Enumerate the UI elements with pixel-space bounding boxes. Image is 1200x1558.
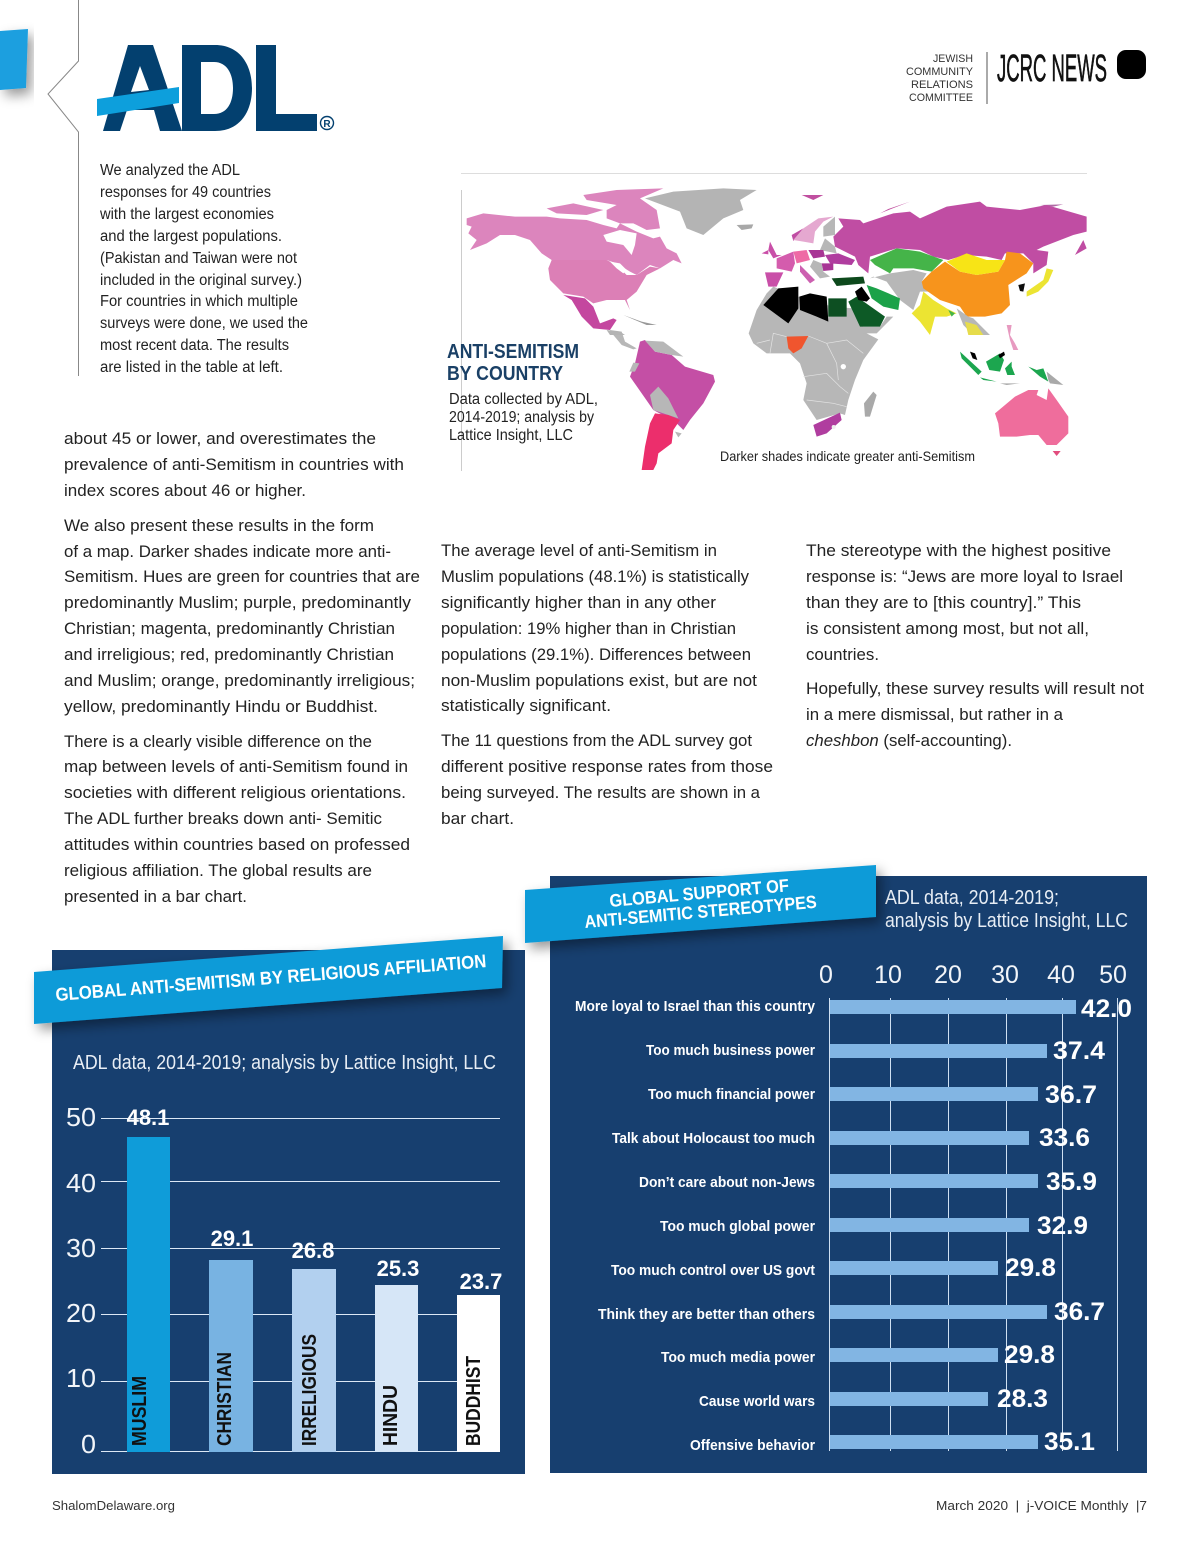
bar labels: HINDU [380, 1385, 402, 1446]
map source note: Data collected by ADL, [449, 391, 598, 408]
panel: religious affiliation bar chart [52, 950, 525, 1474]
intro text block: We analyzed the ADL [100, 162, 240, 179]
bar labels: IRRELIGIOUS [299, 1334, 321, 1446]
intro text block [99, 162, 308, 376]
body text: left column: and Muslim; orange, predominantly irreligious; [64, 671, 415, 690]
row labels: Offensive behavior [690, 1437, 815, 1454]
row labels: Too much control over US govt [611, 1262, 815, 1279]
x axis labels: 20 [934, 961, 962, 989]
row labels: Too much media power [661, 1349, 815, 1366]
x axis labels: 40 [1047, 961, 1075, 989]
banner: religious affiliation title [34, 936, 503, 1024]
body text: left column: presented in a bar chart. [64, 887, 247, 906]
body text: left column: prevalence of anti-Semitism in countries with [64, 455, 404, 474]
body text: middle column: bar chart. [441, 809, 514, 828]
bar values: 28.3 [997, 1385, 1048, 1413]
bar values: 42.0 [1081, 995, 1132, 1023]
y axis labels: 20 [66, 1298, 96, 1328]
body text: left column: religious affiliation. The global results are [64, 861, 372, 880]
body text: left column: of a map. Darker shades indicate more anti- [64, 542, 391, 561]
horizontal bars [830, 1000, 1076, 1449]
North America and Greenland [467, 188, 757, 335]
x axis labels: 30 [991, 961, 1019, 989]
body text: left column: The ADL further breaks down anti- Semitic [64, 809, 382, 828]
header: JCRC label [906, 53, 974, 104]
row labels [575, 998, 816, 1454]
footer: website: ShalomDelaware.org [52, 1498, 175, 1513]
bar labels: MUSLIM [129, 1376, 151, 1446]
world map [461, 174, 1087, 471]
bars [127, 1137, 500, 1452]
row labels: Don’t care about non-Jews [639, 1174, 815, 1191]
body text: right column: Hopefully, these survey results will result not [806, 679, 1144, 698]
body text: right column [806, 541, 1144, 750]
header: JCRC label: RELATIONS [911, 79, 973, 91]
page tab: blue corner marker [0, 29, 28, 90]
sidebar outline [48, 0, 78, 376]
bar values: 29.1 [211, 1226, 253, 1251]
body text: right column: than they are to [this country].” This [806, 593, 1081, 612]
row labels: More loyal to Israel than this country [575, 998, 816, 1015]
banner: religious affiliation title: GLOBAL ANTI-SEMITISM BY RELIGIOUS AFFILIATION [55, 950, 487, 1005]
chart subtitle: analysis by Lattice Insight, LLC [885, 910, 1128, 932]
row labels: Too much global power [660, 1218, 815, 1235]
banner: stereotypes title [525, 865, 876, 943]
body text: right column: in a mere dismissal, but rather in a [806, 705, 1064, 724]
bar labels [129, 1334, 485, 1446]
row labels: Too much financial power [648, 1086, 815, 1103]
body text: left column: Semitism. Hues are green for countries that are [64, 567, 420, 586]
footer: issue and page number: March 2020 | j-VOICE Monthly |7 [936, 1498, 1147, 1513]
body text: left column: map between levels of anti-Semitism found in [64, 757, 408, 776]
body text: middle column: Muslim populations (48.1%) is statistically [441, 567, 749, 586]
body text: left column: predominantly Muslim; purple, predominantly [64, 593, 412, 612]
bar values: 33.6 [1039, 1124, 1090, 1152]
body text: left column: index scores about 46 or higher. [64, 481, 306, 500]
body text: middle column: significantly higher than in any other [441, 593, 716, 612]
header: JCRC label: JEWISH [933, 53, 973, 65]
row labels: Talk about Holocaust too much [612, 1130, 815, 1147]
body text: left column: There is a clearly visible difference on the [64, 732, 372, 751]
bar values: 29.8 [1004, 1341, 1055, 1369]
body text: left column: about 45 or lower, and overestimates the [64, 429, 376, 448]
bar values: 36.7 [1045, 1081, 1097, 1109]
body text: middle column [441, 541, 773, 828]
y axis labels: 30 [66, 1233, 96, 1263]
chart subtitle: ADL data, 2014-2019; [885, 887, 1059, 909]
panel: stereotypes bar chart [550, 876, 1147, 1473]
body text: middle column: being surveyed. The results are shown in a [441, 783, 761, 802]
row labels: Cause world wars [699, 1393, 815, 1410]
bar values: 37.4 [1053, 1037, 1105, 1065]
bar values [127, 1105, 502, 1294]
body text: left column: and irreligious; red, predominantly Christian [64, 645, 394, 664]
intro text block: included in the original survey.) [100, 272, 302, 289]
map source note: 2014-2019; analysis by [449, 409, 594, 426]
y axis labels: 40 [66, 1168, 96, 1198]
y axis labels: 0 [81, 1429, 96, 1459]
body text: left column: We also present these results in the form [64, 516, 374, 535]
x axis labels: 0 [819, 961, 833, 989]
body text: right column: is consistent among most, but not all, [806, 619, 1089, 638]
header: JCRC News title [987, 48, 1146, 104]
body text: left column: attitudes within countries based on professed [64, 835, 410, 854]
intro text block: most recent data. The results [100, 337, 289, 354]
bar values: 36.7 [1054, 1298, 1105, 1326]
bar values: 25.3 [377, 1256, 419, 1281]
Europe, Middle East and Asia [762, 195, 1087, 335]
bar values: 48.1 [127, 1105, 169, 1130]
chart subtitle: ADL data, 2014-2019; analysis by Lattice Insight, LLC [73, 1052, 496, 1074]
Southeast Asia and Australia [960, 325, 1068, 456]
map heading: BY COUNTRY [447, 363, 564, 385]
body text: middle column: The 11 questions from the ADL survey got [441, 731, 752, 750]
y axis labels: 50 [66, 1102, 96, 1132]
intro text block: For countries in which multiple [100, 293, 298, 310]
intro text block: responses for 49 countries [100, 184, 271, 201]
bar values: 29.8 [1005, 1254, 1056, 1282]
intro text block: with the largest economies [99, 206, 274, 223]
bar values: 35.9 [1046, 1168, 1097, 1196]
map heading [447, 341, 579, 385]
x axis labels: 10 [874, 961, 902, 989]
body text: middle column: The average level of anti-Semitism in [441, 541, 717, 560]
intro text block: are listed in the table at left. [100, 359, 283, 376]
y axis labels: 10 [66, 1363, 96, 1393]
body text: right column: countries. [806, 645, 879, 664]
body text: left column [64, 429, 420, 906]
bar values [997, 995, 1132, 1456]
body text: middle column: non-Muslim populations exist, but are not [441, 671, 757, 690]
body text: left column: Christian; magenta, predominantly Christian [64, 619, 395, 638]
row labels: Think they are better than others [598, 1306, 815, 1323]
map heading: ANTI-SEMITISM [447, 341, 579, 363]
ADL logo: R [323, 119, 331, 130]
body text: right column: response is: “Jews are more loyal to Israel [806, 567, 1123, 586]
bar labels: CHRISTIAN [214, 1352, 236, 1446]
bar values: 32.9 [1037, 1212, 1088, 1240]
body text: middle column: population: 19% higher than in Christian [441, 619, 736, 638]
intro text block: (Pakistan and Taiwan were not [100, 250, 298, 267]
bar labels: BUDDHIST [463, 1356, 485, 1446]
map source note: Lattice Insight, LLC [449, 427, 573, 444]
bar values: 23.7 [460, 1269, 502, 1294]
banner: stereotypes title: GLOBAL SUPPORT OF [609, 875, 790, 911]
Africa and South America [610, 287, 878, 470]
bar values: 35.1 [1044, 1428, 1095, 1456]
map caption: Darker shades indicate greater anti-Semitism [720, 448, 975, 464]
ADL logo [97, 45, 334, 131]
x axis labels: 50 [1099, 961, 1127, 989]
body text: left column: societies with different religious orientations. [64, 783, 406, 802]
body text: middle column: statistically significant. [441, 696, 611, 715]
body text: right column: cheshbon (self-accounting). [806, 731, 1012, 750]
intro text block: surveys were done, we used the [100, 315, 308, 332]
map source note [449, 391, 598, 444]
body text: right column: The stereotype with the highest positive [806, 541, 1111, 560]
chart subtitle [885, 887, 1128, 932]
body text: middle column: populations (29.1%). Differences between [441, 645, 751, 664]
intro text block: and the largest populations. [100, 228, 282, 245]
row labels: Too much business power [646, 1042, 815, 1059]
body text: left column: yellow, predominantly Hindu or Buddhist. [64, 697, 378, 716]
banner: stereotypes title: ANTI-SEMITIC STEREOTYPES [584, 892, 817, 932]
bar values: 26.8 [292, 1238, 334, 1263]
x axis labels [819, 961, 1127, 989]
header: JCRC label: COMMUNITY [906, 66, 974, 78]
y axis labels [66, 1102, 96, 1459]
header: JCRC label: COMMITTEE [909, 92, 973, 104]
body text: middle column: different positive response rates from those [441, 757, 773, 776]
